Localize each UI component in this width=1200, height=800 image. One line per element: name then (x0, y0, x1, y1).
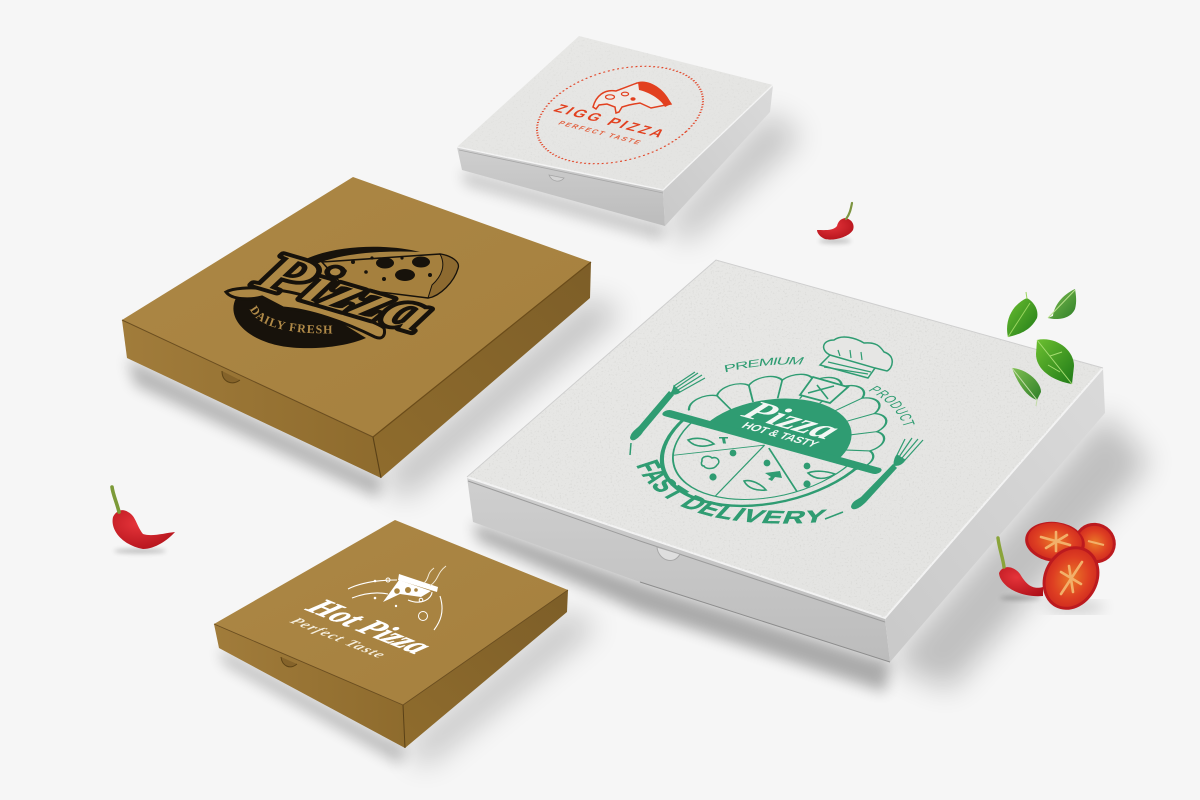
heading: Fast Delivery: FAST DELIVERY (636, 459, 828, 524)
panel: large white box with Fast Delivery logo (466, 260, 1105, 662)
rolling pin (668, 413, 876, 471)
icon: chef hat (820, 337, 892, 378)
text: Premium: PREMIUM (724, 357, 804, 372)
text: Hot and Tasty: HOT & TASTY (738, 420, 822, 450)
text: Product: PRODUCT (868, 386, 915, 426)
icon: tomatoes and chili (998, 516, 1122, 620)
decorative ring ends (630, 443, 843, 519)
icon: chili top (817, 203, 854, 244)
icon: white pizza slice and swirls (348, 566, 446, 630)
emblem ring top (300, 247, 420, 266)
tomato slice front (1032, 536, 1110, 620)
leaf three (1036, 339, 1074, 384)
logo: Pizza Daily Fresh (224, 240, 460, 348)
icon: red pizza slice (593, 82, 671, 113)
leaf four (1012, 368, 1041, 406)
logo: Zigg Pizza (504, 53, 736, 177)
chili right (998, 538, 1043, 596)
crescent with Daily Fresh: DAILY FRESH (250, 305, 332, 334)
crescent with Daily Fresh (233, 298, 366, 348)
pizza slice (322, 254, 458, 298)
sauce half disc (706, 384, 883, 460)
panel: small white box with Zigg Pizza logo (457, 36, 773, 226)
tomato slice middle (1023, 518, 1087, 566)
logo: Hot Pizza: Hot Pizza (297, 595, 441, 658)
logo: Hot Pizza (281, 566, 446, 667)
script lettering: Pizza (243, 240, 447, 344)
panel: large brown box with Pizza Daily Fresh logo (122, 177, 592, 478)
icon: right fork (851, 438, 923, 509)
swoosh under lettering (226, 288, 385, 338)
icon: basil leaves (1007, 289, 1076, 406)
panel: small brown box with Hot Pizza logo (214, 520, 568, 748)
icon: chili left (112, 487, 175, 554)
logo: Hot Pizza: Perfect Taste (286, 616, 392, 661)
pizza outline and crust (609, 354, 935, 527)
script lettering: Pizza (243, 240, 447, 344)
text: Pizza: Pizza (733, 395, 850, 445)
logo: Zigg Pizza: PERFECT TASTE (556, 119, 645, 146)
box shadows (127, 112, 1150, 766)
logo: Pizza Fast Delivery (629, 336, 924, 524)
icon: left fork (630, 372, 705, 440)
icon: peel tag (800, 377, 848, 403)
leaf two (1048, 289, 1076, 319)
tomato slice back (1068, 516, 1122, 570)
leaf one (1007, 292, 1037, 337)
icon: pizza toppings (688, 437, 835, 490)
logo: Zigg Pizza: ZIGG PIZZA (550, 102, 671, 141)
